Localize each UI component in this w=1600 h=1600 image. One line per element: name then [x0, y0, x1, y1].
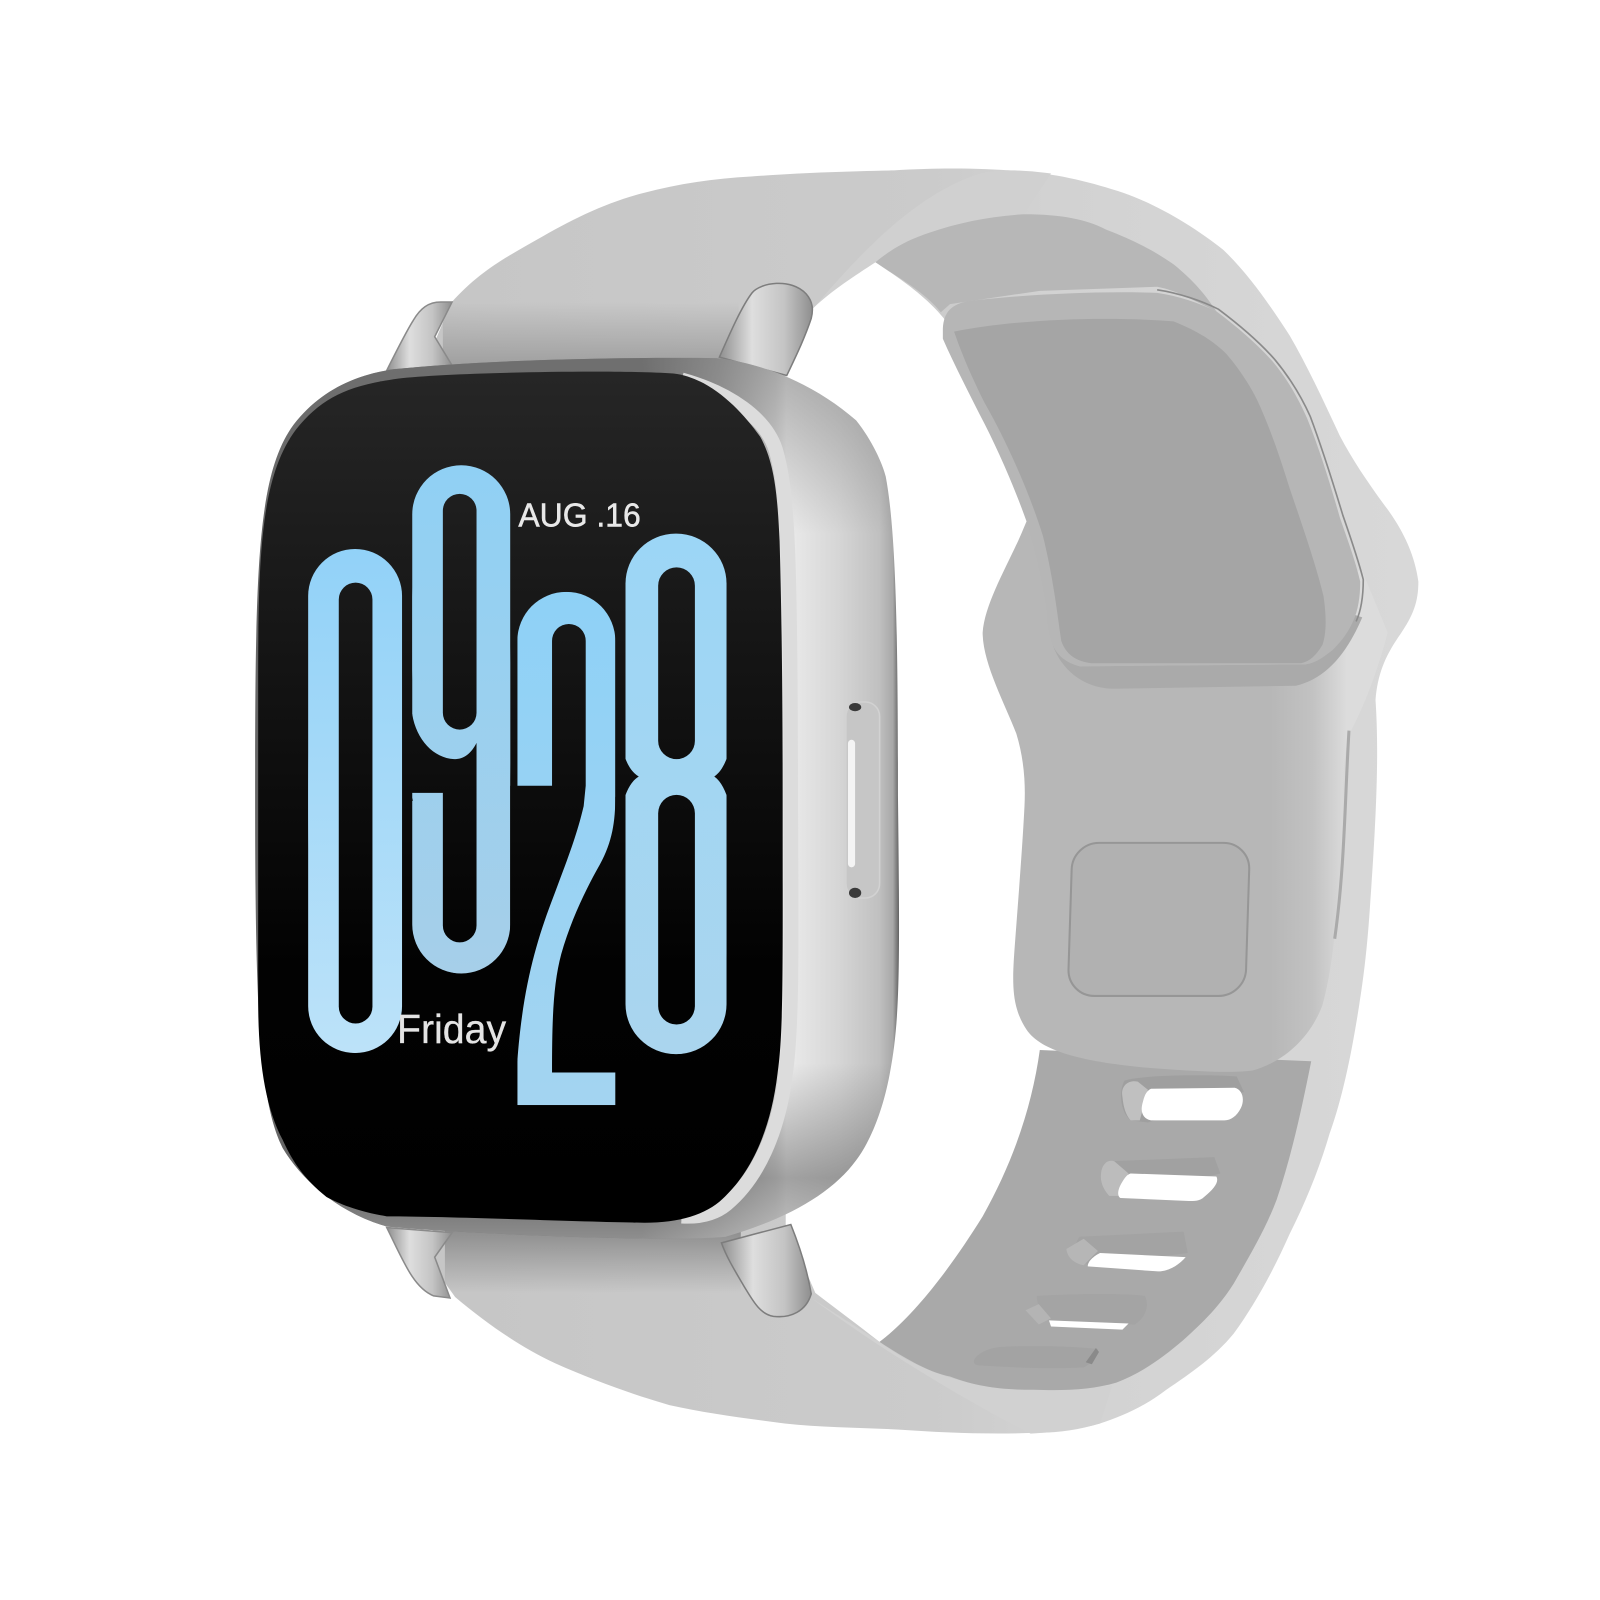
upper rim highlight [814, 170, 1051, 307]
digit 8 [626, 534, 727, 1054]
strap inner surface top [876, 214, 1216, 312]
strap tongue [943, 290, 1363, 666]
side button [846, 702, 880, 898]
screen bevel highlight [682, 380, 791, 1217]
hole 5 [974, 1346, 1099, 1368]
shadow below case [445, 1230, 741, 1293]
hole 2 [1101, 1157, 1220, 1201]
shadow band under tongue [1053, 612, 1362, 689]
smartwatch illustration [255, 168, 1418, 1434]
strap outer band silhouette [433, 169, 1418, 1433]
weekday label: Friday [397, 1006, 507, 1052]
button highlight [848, 740, 855, 867]
digit 8: 8 [617, 385, 735, 1203]
digit 2: 2 [511, 442, 625, 1260]
tongue edge line [1157, 290, 1363, 621]
digit 0 [308, 549, 402, 1053]
button body [846, 702, 880, 898]
lower rim highlight [811, 1298, 1112, 1434]
square recess [1068, 843, 1250, 996]
hole 1 [1121, 1075, 1244, 1122]
lugs [387, 283, 812, 1317]
date label: AUG .16 [518, 498, 641, 535]
keeper body [983, 521, 1388, 1072]
lower inner band [880, 1050, 1311, 1390]
shadow above case [443, 302, 739, 365]
bottom left lug [387, 1228, 452, 1298]
case body [255, 358, 899, 1239]
digit 9: 9 [404, 321, 519, 1119]
keeper loop [983, 521, 1388, 1072]
watch case [255, 358, 899, 1239]
rim crease line [1335, 731, 1349, 939]
tongue inner face [954, 319, 1326, 663]
digit 0: 0 [300, 404, 410, 1197]
screen [258, 372, 783, 1223]
strap inner surface lower with adjustment holes [880, 1050, 1311, 1390]
top left lug [387, 302, 452, 370]
bottom right lug [721, 1224, 811, 1317]
digit 2 [510, 592, 616, 1106]
case top and bottom shading [255, 358, 899, 1239]
hole 3 [1066, 1232, 1188, 1271]
hole 4 [1026, 1294, 1147, 1330]
watch face [308, 465, 727, 1106]
digit 9 [412, 465, 510, 974]
tongue body [943, 292, 1360, 666]
strap [433, 169, 1418, 1434]
top right lug [719, 283, 812, 376]
wrist opening [786, 262, 1122, 1342]
button bottom shadow [849, 888, 861, 898]
button top shadow [849, 703, 861, 711]
